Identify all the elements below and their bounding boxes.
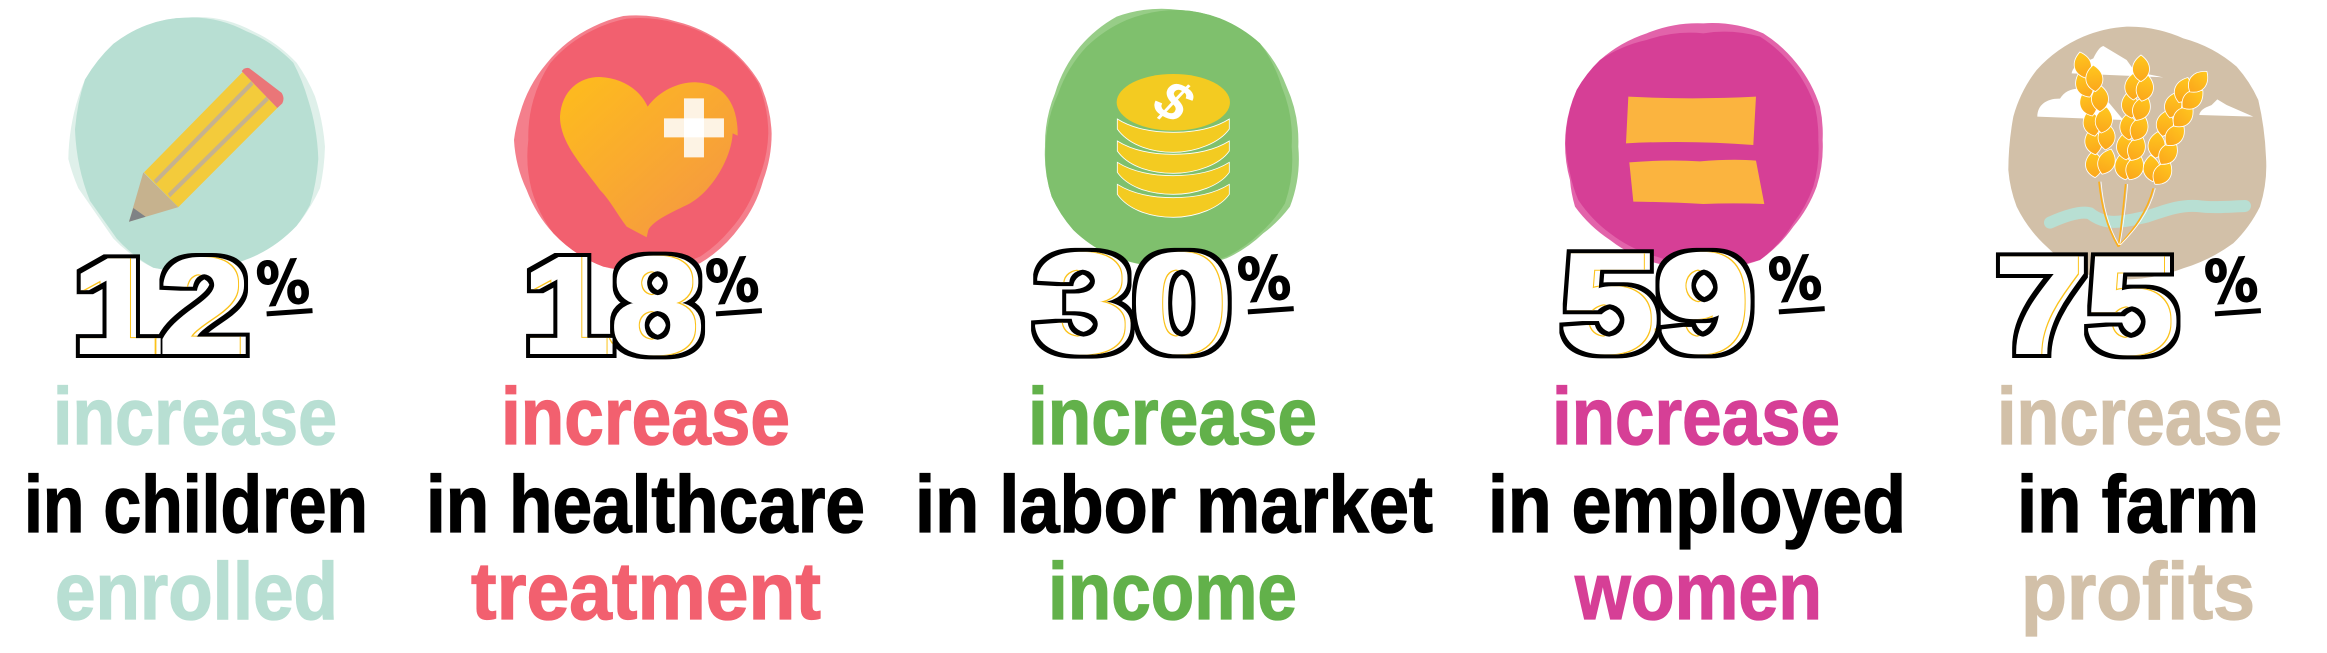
percent sign: %	[1235, 243, 1293, 317]
percent sign: %	[703, 245, 761, 319]
label: increase in healthcare treatment: treatment	[471, 547, 821, 637]
label: increase in labor market income	[915, 372, 1433, 637]
percent sign: %	[1766, 243, 1824, 317]
label: increase in labor market income: increase	[1028, 372, 1317, 462]
number: 12: 12	[74, 230, 248, 382]
panel: farm profits	[1997, 27, 2282, 637]
label: increase in healthcare treatment: increase	[501, 372, 790, 462]
percent sign: %	[254, 247, 312, 321]
label: increase in children enrolled: enrolled	[55, 547, 338, 637]
label: increase in children enrolled	[24, 372, 368, 637]
number: 18: 18	[524, 229, 702, 383]
number: 30: 30	[1035, 224, 1231, 383]
icon: green blob with coin stack	[1045, 9, 1299, 267]
label: increase in healthcare treatment	[426, 372, 865, 637]
label: increase in employed women	[1488, 372, 1906, 637]
label: increase in labor market income: income	[1048, 547, 1297, 637]
icon: mint blob with pencil	[68, 17, 325, 271]
icon: red blob with heart and cross	[514, 15, 772, 272]
number: 75: 75	[1997, 228, 2177, 383]
icon: magenta blob with equals sign	[1565, 23, 1823, 270]
icon: tan blob with wheat, clouds and river	[2008, 27, 2266, 279]
label: increase in farm profits: increase	[1997, 372, 2282, 462]
icon: green blob with coin stack: $	[1143, 66, 1204, 136]
panel: children enrolled	[24, 17, 368, 637]
label: increase in employed women: in employed	[1488, 460, 1906, 550]
label: increase in farm profits: in farm	[2017, 460, 2259, 550]
label: increase in employed women: women	[1574, 547, 1822, 637]
label: increase in children enrolled: in children	[24, 460, 368, 550]
label: increase in children enrolled: increase	[53, 372, 337, 462]
number: 59: 59	[1562, 224, 1753, 383]
label: increase in employed women: increase	[1552, 372, 1840, 462]
label: increase in farm profits: profits	[2021, 547, 2255, 637]
label: increase in healthcare treatment: in healthcare	[426, 460, 865, 550]
label: increase in labor market income: in labor market	[915, 460, 1433, 550]
panel: employed women	[1488, 23, 1906, 637]
panel: healthcare treatment	[426, 15, 865, 637]
panel: labor market income	[915, 9, 1433, 637]
percent sign: %	[2202, 245, 2260, 319]
label: increase in farm profits	[1997, 372, 2282, 637]
